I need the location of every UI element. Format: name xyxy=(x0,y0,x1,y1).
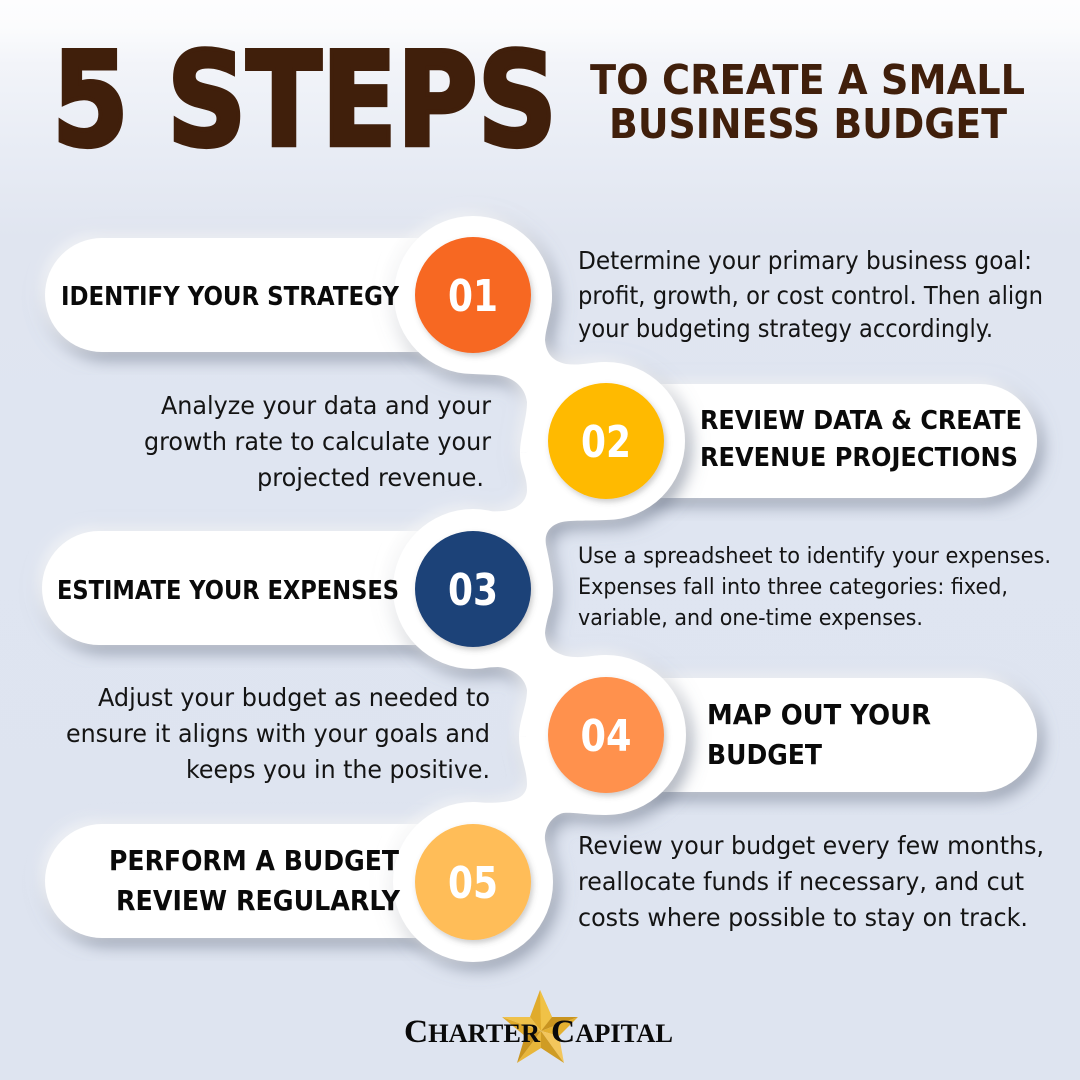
step 3 number badge: 03 xyxy=(448,565,498,616)
step 4 heading: BUDGET xyxy=(707,738,822,771)
logo wordmark: CAPITAL xyxy=(551,1014,673,1050)
subtitle: BUSINESS BUDGET xyxy=(609,100,1007,148)
step 1 number badge xyxy=(415,237,531,353)
step 5 description: Review your budget every few months, xyxy=(578,831,1044,860)
step 2 description: growth rate to calculate your xyxy=(144,427,492,456)
step 2 heading xyxy=(700,406,1022,473)
white connector blob xyxy=(393,216,686,962)
step 3 description: Use a spreadsheet to identify your expenses. xyxy=(578,544,1051,569)
step 1 description xyxy=(578,246,1043,343)
subtitle xyxy=(590,56,1025,148)
step 1 xyxy=(61,237,1043,353)
step 5 heading: PERFORM A BUDGET xyxy=(109,844,399,877)
step 1 heading: IDENTIFY YOUR STRATEGY xyxy=(61,282,400,312)
step 2 xyxy=(144,383,1022,499)
icon: gold star xyxy=(502,990,578,1063)
pill: step 2 xyxy=(606,384,1037,498)
step 4 description xyxy=(66,683,490,784)
step 1 description: profit, growth, or cost control. Then align xyxy=(578,281,1043,310)
pill: step 4 xyxy=(606,678,1037,792)
step 1 description: Determine your primary business goal: xyxy=(578,246,1032,275)
step 3 heading: ESTIMATE YOUR EXPENSES xyxy=(57,576,399,606)
pill: step 5 xyxy=(45,824,475,938)
step 3 xyxy=(57,531,1051,647)
step 5 xyxy=(109,824,1044,940)
step 4 description: Adjust your budget as needed to xyxy=(98,683,490,712)
step 4 number badge: 04 xyxy=(580,711,632,762)
pill: step 1 xyxy=(45,238,475,352)
step 5 description: reallocate funds if necessary, and cut xyxy=(578,867,1024,896)
step 2 heading: REVENUE PROJECTIONS xyxy=(700,443,1018,473)
step 2 description xyxy=(144,391,492,492)
logo wordmark xyxy=(404,1014,673,1050)
step 1 number badge: 01 xyxy=(448,271,498,322)
subtitle: TO CREATE A SMALL xyxy=(590,56,1025,104)
logo wordmark: CHARTER xyxy=(404,1014,540,1050)
step 5 heading: REVIEW REGULARLY xyxy=(116,884,401,917)
step 5 number badge xyxy=(415,824,531,940)
step 4 description: ensure it aligns with your goals and xyxy=(66,719,490,748)
title: 5 STEPS: 5 STEPS xyxy=(52,24,557,176)
step 2 heading: REVIEW DATA & CREATE xyxy=(700,406,1022,436)
pill: step 3 xyxy=(42,531,475,645)
step 5 description xyxy=(578,831,1044,932)
step 2 number badge: 02 xyxy=(581,417,631,468)
step 3 description: variable, and one-time expenses. xyxy=(578,606,923,631)
step 1 description: your budgeting strategy accordingly. xyxy=(578,314,993,343)
step 4 xyxy=(66,677,931,793)
step 2 description: Analyze your data and your xyxy=(161,391,492,420)
step 5 number badge: 05 xyxy=(448,858,498,909)
step 5 heading xyxy=(109,844,401,917)
logo: Charter Capital xyxy=(404,990,673,1063)
step 5 description: costs where possible to stay on track. xyxy=(578,903,1028,932)
step 4 heading xyxy=(707,698,931,771)
step 4 number badge xyxy=(548,677,664,793)
step 2 number badge xyxy=(548,383,664,499)
step 4 description: keeps you in the positive. xyxy=(186,755,490,784)
step 4 heading: MAP OUT YOUR xyxy=(707,698,931,731)
step 3 description: Expenses fall into three categories: fixed, xyxy=(578,575,1008,600)
step 3 description xyxy=(578,544,1051,631)
title xyxy=(52,24,1025,176)
step 2 description: projected revenue. xyxy=(257,463,484,492)
step 3 number badge xyxy=(415,531,531,647)
